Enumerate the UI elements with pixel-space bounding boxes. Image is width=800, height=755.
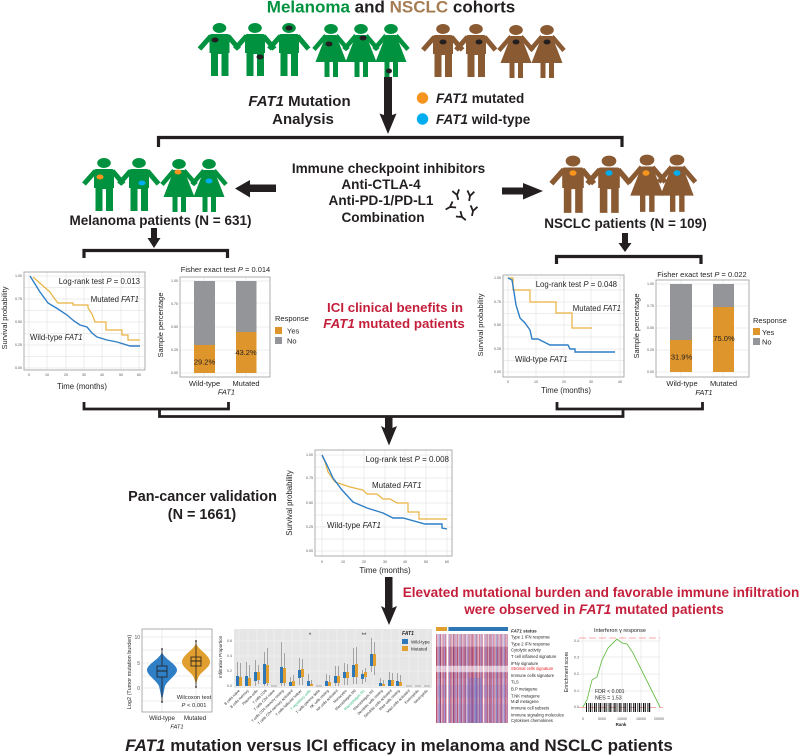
chart: NSCLC survival: Survival probability [476, 293, 485, 356]
arrow: NSCLC down [618, 233, 632, 252]
chart: melanoma response bars [156, 265, 270, 396]
chart: NSCLC survival: 0.75 [494, 300, 501, 304]
chart: tumor mutation burden violin: Wild-type [149, 715, 175, 722]
labels: immune signatures: Stromal cells signature [511, 666, 554, 671]
axis labels: immune cell types: Plasma cells [242, 689, 259, 706]
chart: NSCLC survival: 1.00 [494, 276, 501, 280]
icon: antibodies [444, 189, 477, 223]
text: immune checkpoint inhibitors: Anti-PD-1/PD-L1 [329, 193, 434, 208]
text: immune checkpoint inhibitors: Anti-CTLA-4 [341, 177, 421, 192]
chart: melanoma response bars: Mutated [232, 379, 260, 388]
chart: GSEA interferon gamma: Enrichment score [564, 652, 570, 692]
chart: NSCLC survival: Time (months) [541, 386, 591, 395]
labels: immune signatures: FAT1 status [511, 628, 537, 634]
axis labels: immune cell types: Eosinophils [404, 689, 420, 705]
bracket: NSCLC top [556, 256, 701, 264]
curve: melanoma mutated [33, 277, 140, 340]
bracket: merge to pan-cancer [84, 402, 702, 416]
axis labels: immune cell types: T cells CD4 naive [253, 689, 276, 712]
chart: GSEA interferon gamma: Interferon γ response [594, 628, 646, 634]
chart: pan-cancer survival: Wild-type FAT1 [327, 521, 381, 530]
chart: NSCLC response bars: Sample percentage [632, 293, 641, 359]
curve: pan-cancer wild-type [322, 455, 447, 529]
arrow: to NSCLC [502, 183, 543, 200]
chart: GSEA interferon gamma: Rank [616, 722, 627, 727]
chart: melanoma survival: 0 [28, 373, 30, 377]
labels: immune signatures: IFNγ signature [511, 661, 539, 666]
chart: pan-cancer survival: 0.75 [306, 476, 313, 480]
callout: ICI clinical benefits: ICI clinical benefits in [327, 300, 463, 315]
violin: wild-type [147, 652, 177, 700]
legend: NSCLC response: No [762, 338, 772, 346]
axis labels: immune cell types: B cells memory [230, 689, 250, 709]
chart: melanoma survival: 1.00 [15, 274, 22, 278]
chart: immune signature heatmap [436, 627, 564, 723]
chart: immune infiltration boxplots [218, 629, 432, 726]
chart: melanoma response bars: 29.2% [194, 358, 215, 366]
axis labels: immune cell types: T cells gamma delta [295, 689, 321, 714]
chart: GSEA interferon gamma: FDR < 0.001 [595, 689, 625, 695]
curve: melanoma wild-type [30, 276, 140, 346]
chart: NSCLC response bars: Mutated [710, 379, 737, 388]
chart: NSCLC response bars: 0.25 [647, 348, 654, 352]
arrow: to immune analyses [381, 577, 397, 625]
text: pan-cancer validation: Pan-cancer validation [128, 489, 277, 505]
chart: melanoma response bars: Sample percentage [156, 292, 165, 358]
callout: ICI clinical benefits: FAT1 mutated patients [323, 316, 465, 331]
chart: immune infiltration boxplots: Infiltration Proportion [218, 635, 223, 678]
icon: NSCLC cohort people [423, 24, 564, 78]
chart: NSCLC survival: 30 [589, 380, 593, 384]
chart: pan-cancer survival [285, 450, 452, 575]
labels: immune signatures: TLS [511, 680, 519, 684]
chart: melanoma survival: Wild-type FAT1 [30, 333, 83, 342]
legend: melanoma response: Response [275, 314, 309, 323]
axis labels: immune cell types: NK cells resting [309, 689, 330, 709]
icon: melanoma patients [84, 158, 226, 212]
icon: melanoma cohort people [200, 23, 408, 77]
text: pan-cancer validation: (N = 1661) [168, 507, 236, 523]
chart: pan-cancer survival: 0 [321, 560, 323, 564]
labels: immune signatures: Cytokines chemokines [511, 718, 553, 723]
axis labels: immune cell types: Mast cells activated [386, 689, 411, 714]
chart: melanoma survival: 0.50 [15, 320, 22, 324]
violin: mutated [182, 643, 210, 684]
chart: melanoma survival: 40 [100, 373, 104, 377]
chart: NSCLC survival [476, 275, 624, 395]
axis labels: immune cell types: Macrophages M2 [352, 689, 375, 711]
legend: mutation status: FAT1 wild-type [436, 112, 531, 127]
chart: melanoma survival: 10 [45, 373, 49, 377]
chart: melanoma survival [0, 272, 145, 391]
axis labels: immune cell types: T regulatory cells [290, 689, 312, 711]
chart: melanoma survival: 0.00 [15, 366, 22, 370]
chart: GSEA interferon gamma: 15000 [636, 717, 646, 721]
chart: GSEA interferon gamma [564, 628, 664, 727]
chart: NSCLC survival: 0.00 [494, 370, 501, 374]
axis labels: immune cell types: Neutrophils [413, 689, 429, 705]
chart: NSCLC response bars: 1.00 [647, 282, 654, 286]
legend: NSCLC response: Yes [762, 328, 774, 337]
legend: mutation status [417, 91, 531, 127]
chart: pan-cancer survival: 0.25 [306, 525, 313, 529]
chart: NSCLC survival: 20 [562, 380, 566, 384]
chart: NSCLC response bars: 31.9% [671, 352, 692, 362]
chart: immune infiltration boxplots: 0.4 [227, 654, 232, 658]
labels: immune signatures: Immune cell subsets [511, 706, 549, 710]
boxes: wild-type [236, 654, 399, 686]
labels: immune signatures: Type 2 IFN response [511, 642, 551, 646]
axis labels: immune cell types: Dendritic cells resting [357, 689, 384, 716]
chart: melanoma response bars: 0.50 [171, 325, 178, 329]
axis labels: immune cell types: T cells follicular helper [275, 688, 303, 717]
legend: melanoma response [275, 314, 309, 346]
chart: GSEA interferon gamma: NES = 1.53 [595, 696, 622, 702]
footer title: FAT1 mutation versus ICI efficacy in melanoma and NSCLC patients [125, 736, 673, 755]
chart: melanoma survival: 30 [82, 373, 86, 377]
curve: pan-cancer mutated [322, 455, 447, 519]
chart: pan-cancer survival: 0.50 [306, 501, 313, 505]
chart: melanoma response bars: 0.75 [171, 302, 178, 306]
chart: NSCLC survival: 0.25 [494, 347, 501, 351]
labels: immune signatures: Cytolytic activity [511, 648, 542, 652]
labels: immune signatures: T cell inflamed signature [511, 654, 557, 659]
chart: GSEA interferon gamma: 20000 [654, 717, 664, 721]
text: immune checkpoint inhibitors: Immune checkpoint inhibitors [292, 161, 485, 176]
chart: melanoma response bars: Wild-type [189, 379, 220, 388]
chart: tumor mutation burden violin: Mutated [184, 715, 207, 722]
callout: elevated mutational burden: Elevated mutational burden and favorable immune infiltration [403, 585, 799, 600]
chart: melanoma response bars: Fisher exact test P = 0.014 [181, 265, 270, 274]
chart: pan-cancer survival: 50 [424, 560, 428, 564]
legend: melanoma response: No [287, 336, 297, 346]
chart: melanoma survival: 60 [137, 373, 141, 377]
chart: GSEA interferon gamma: 10000 [617, 717, 627, 721]
chart: tumor mutation burden violin: FAT1 [170, 724, 184, 730]
icon: tumor dots on cohort [212, 26, 550, 74]
chart: immune infiltration boxplots: 0.2 [227, 669, 232, 673]
labels: immune signatures: Immune signaling molecules [511, 712, 564, 718]
chart: melanoma survival: 50 [119, 373, 123, 377]
labels: immune signatures: B.P metagene [511, 686, 538, 692]
arrow: melanoma down [148, 228, 160, 248]
curve: NSCLC wild-type [508, 278, 615, 352]
chart: melanoma survival: Log-rank test P = 0.013 [59, 277, 140, 286]
chart: melanoma survival: Mutated FAT1 [91, 295, 139, 304]
arrow: cohort to analysis [380, 77, 396, 134]
chart: NSCLC survival: Mutated FAT1 [573, 304, 621, 313]
axis labels: immune cell types: Monocytes [333, 689, 348, 704]
legend: melanoma response: Yes [287, 326, 299, 336]
chart: pan-cancer survival: 1.00 [306, 453, 313, 457]
chart: immune infiltration boxplots: * [309, 633, 312, 639]
curve: NSCLC mutated [508, 278, 592, 328]
chart: NSCLC response bars: 0.75 [647, 304, 654, 308]
legend: FAT1 boxplot: Wild-type [411, 640, 430, 644]
labels: immune signatures: T.NK metagene [511, 694, 541, 698]
axis labels: immune cell types: B cells naive [224, 689, 241, 706]
chart: NSCLC response bars: Wild-type [666, 379, 698, 388]
arrow: to melanoma [235, 180, 276, 198]
chart: pan-cancer survival: 10 [341, 560, 345, 564]
chart: melanoma survival: 0.75 [15, 297, 22, 301]
arrow: to pan-cancer [381, 417, 397, 446]
axis labels: immune cell types: NK cells activated [316, 689, 339, 712]
legend: FAT1 boxplot: FAT1 [402, 631, 414, 637]
text: FAT1 mutation analysis: Analysis [272, 111, 334, 128]
label: melanoma patients: Melanoma patients (N = 631) [70, 213, 251, 228]
chart: GSEA interferon gamma: 5000 [598, 717, 606, 721]
axis labels: immune cell types: Dendritic cells activated [363, 689, 393, 718]
chart: pan-cancer survival: 0.00 [306, 549, 313, 553]
bracket: melanoma top [84, 250, 228, 258]
chart: NSCLC survival: 0.50 [494, 323, 501, 327]
chart: melanoma survival: 0.25 [15, 343, 22, 347]
chart: NSCLC response bars [632, 270, 749, 397]
chart: NSCLC response bars: Fisher exact test P = 0.022 [657, 270, 747, 279]
chart: pan-cancer survival: 40 [403, 560, 407, 564]
chart: NSCLC survival: Log-rank test P = 0.048 [536, 280, 617, 289]
chart: NSCLC survival: 40 [618, 380, 622, 384]
chart: NSCLC survival: 10 [534, 380, 538, 384]
chart: melanoma survival: Time (months) [57, 382, 107, 391]
chart: GSEA interferon gamma: 0.0 [574, 705, 579, 709]
text: immune checkpoint inhibitors: Combination [341, 210, 425, 225]
chart: pan-cancer survival: 60 [445, 560, 449, 564]
chart: immune infiltration boxplots: ** [362, 633, 367, 639]
chart: melanoma response bars: 43.2% [235, 348, 257, 357]
chart: NSCLC response bars: 0.50 [647, 326, 654, 330]
chart: tumor mutation burden violin: Log2 (Tumor mutation burden) [127, 635, 133, 709]
text: FAT1 mutation analysis: FAT1 Mutation [248, 93, 351, 110]
chart: NSCLC survival: Wild-type FAT1 [515, 355, 568, 364]
chart: pan-cancer survival: 20 [362, 560, 366, 564]
axis labels: immune cell types: Macrophages M1 [343, 689, 366, 711]
chart: pan-cancer survival: Survival probability [285, 470, 294, 536]
chart: tumor mutation burden violin: 10 [134, 635, 140, 641]
labels: immune signatures: Type 1 IFN response [511, 634, 551, 640]
chart: melanoma response bars: 0.25 [171, 348, 178, 352]
label: NSCLC patients: NSCLC patients (N = 109) [544, 216, 707, 231]
chart: NSCLC response bars: FAT1 [695, 388, 713, 397]
chart: melanoma survival: Survival probability [0, 286, 9, 349]
legend: mutation status: FAT1 mutated [436, 91, 524, 106]
chart: GSEA interferon gamma: 0.3 [574, 656, 579, 660]
boxes: mutated [239, 654, 402, 686]
barcode: ranked genes [586, 703, 651, 712]
axis labels: immune cell types: T cells CD8 [252, 689, 268, 705]
axis labels: immune cell types: T cells CD4 memory activated [257, 689, 294, 726]
legend: FAT1 boxplot: Mutated [411, 646, 428, 652]
chart: GSEA interferon gamma: 0.2 [574, 672, 579, 676]
chart: pan-cancer survival: Log-rank test P = 0.008 [366, 455, 450, 464]
legend: FAT1 boxplot [402, 631, 430, 652]
legend: NSCLC response [753, 316, 787, 346]
axis labels: immune cell types [224, 688, 429, 726]
chart: pan-cancer survival: Time (months) [359, 566, 411, 575]
chart: melanoma response bars: 0.00 [171, 371, 178, 375]
axis labels: immune cell types: Mast cells resting [378, 689, 401, 711]
curve: enrichment score [583, 639, 660, 707]
callout: elevated mutational burden: were observed in FAT1 mutated patients [464, 602, 724, 617]
chart: GSEA interferon gamma: 0.1 [574, 689, 579, 693]
legend: NSCLC response: Response [753, 316, 787, 325]
axis labels: immune cell types: Macrophages M0 [334, 689, 357, 711]
chart: melanoma response bars: 1.00 [171, 279, 178, 283]
axis labels: immune cell types: T cells CD4 memory resting [251, 689, 285, 723]
labels: immune signatures: M.Ø metagene [511, 699, 539, 704]
chart: immune infiltration boxplots: 0.0 [227, 684, 232, 688]
icon: NSCLC patients [551, 155, 695, 213]
labels: immune signatures: Immune cells signature [511, 673, 555, 678]
chart: pan-cancer survival: 30 [383, 560, 387, 564]
chart: GSEA interferon gamma: 0.4 [574, 639, 579, 643]
chart: tumor mutation burden violin: Wilcoxon test [177, 695, 212, 701]
chart: melanoma survival: 20 [64, 373, 68, 377]
chart: NSCLC survival: 0 [507, 380, 509, 384]
chart: tumor mutation burden violin: 5 [137, 661, 140, 667]
chart: tumor mutation burden violin [127, 629, 212, 730]
chart: immune infiltration boxplots: 0.6 [227, 639, 232, 643]
chart: NSCLC response bars: 0.00 [647, 370, 654, 374]
chart: tumor mutation burden violin: P < 0.001 [182, 703, 206, 709]
chart: NSCLC response bars: 75.0% [713, 334, 735, 343]
bracket: split to cohorts [158, 138, 622, 147]
chart: pan-cancer survival: Mutated FAT1 [372, 481, 422, 490]
chart: melanoma response bars: FAT1 [218, 388, 235, 396]
chart: GSEA interferon gamma: 0 [582, 717, 584, 721]
labels: immune signatures [511, 628, 564, 723]
chart: tumor mutation burden violin: 0 [137, 686, 140, 692]
